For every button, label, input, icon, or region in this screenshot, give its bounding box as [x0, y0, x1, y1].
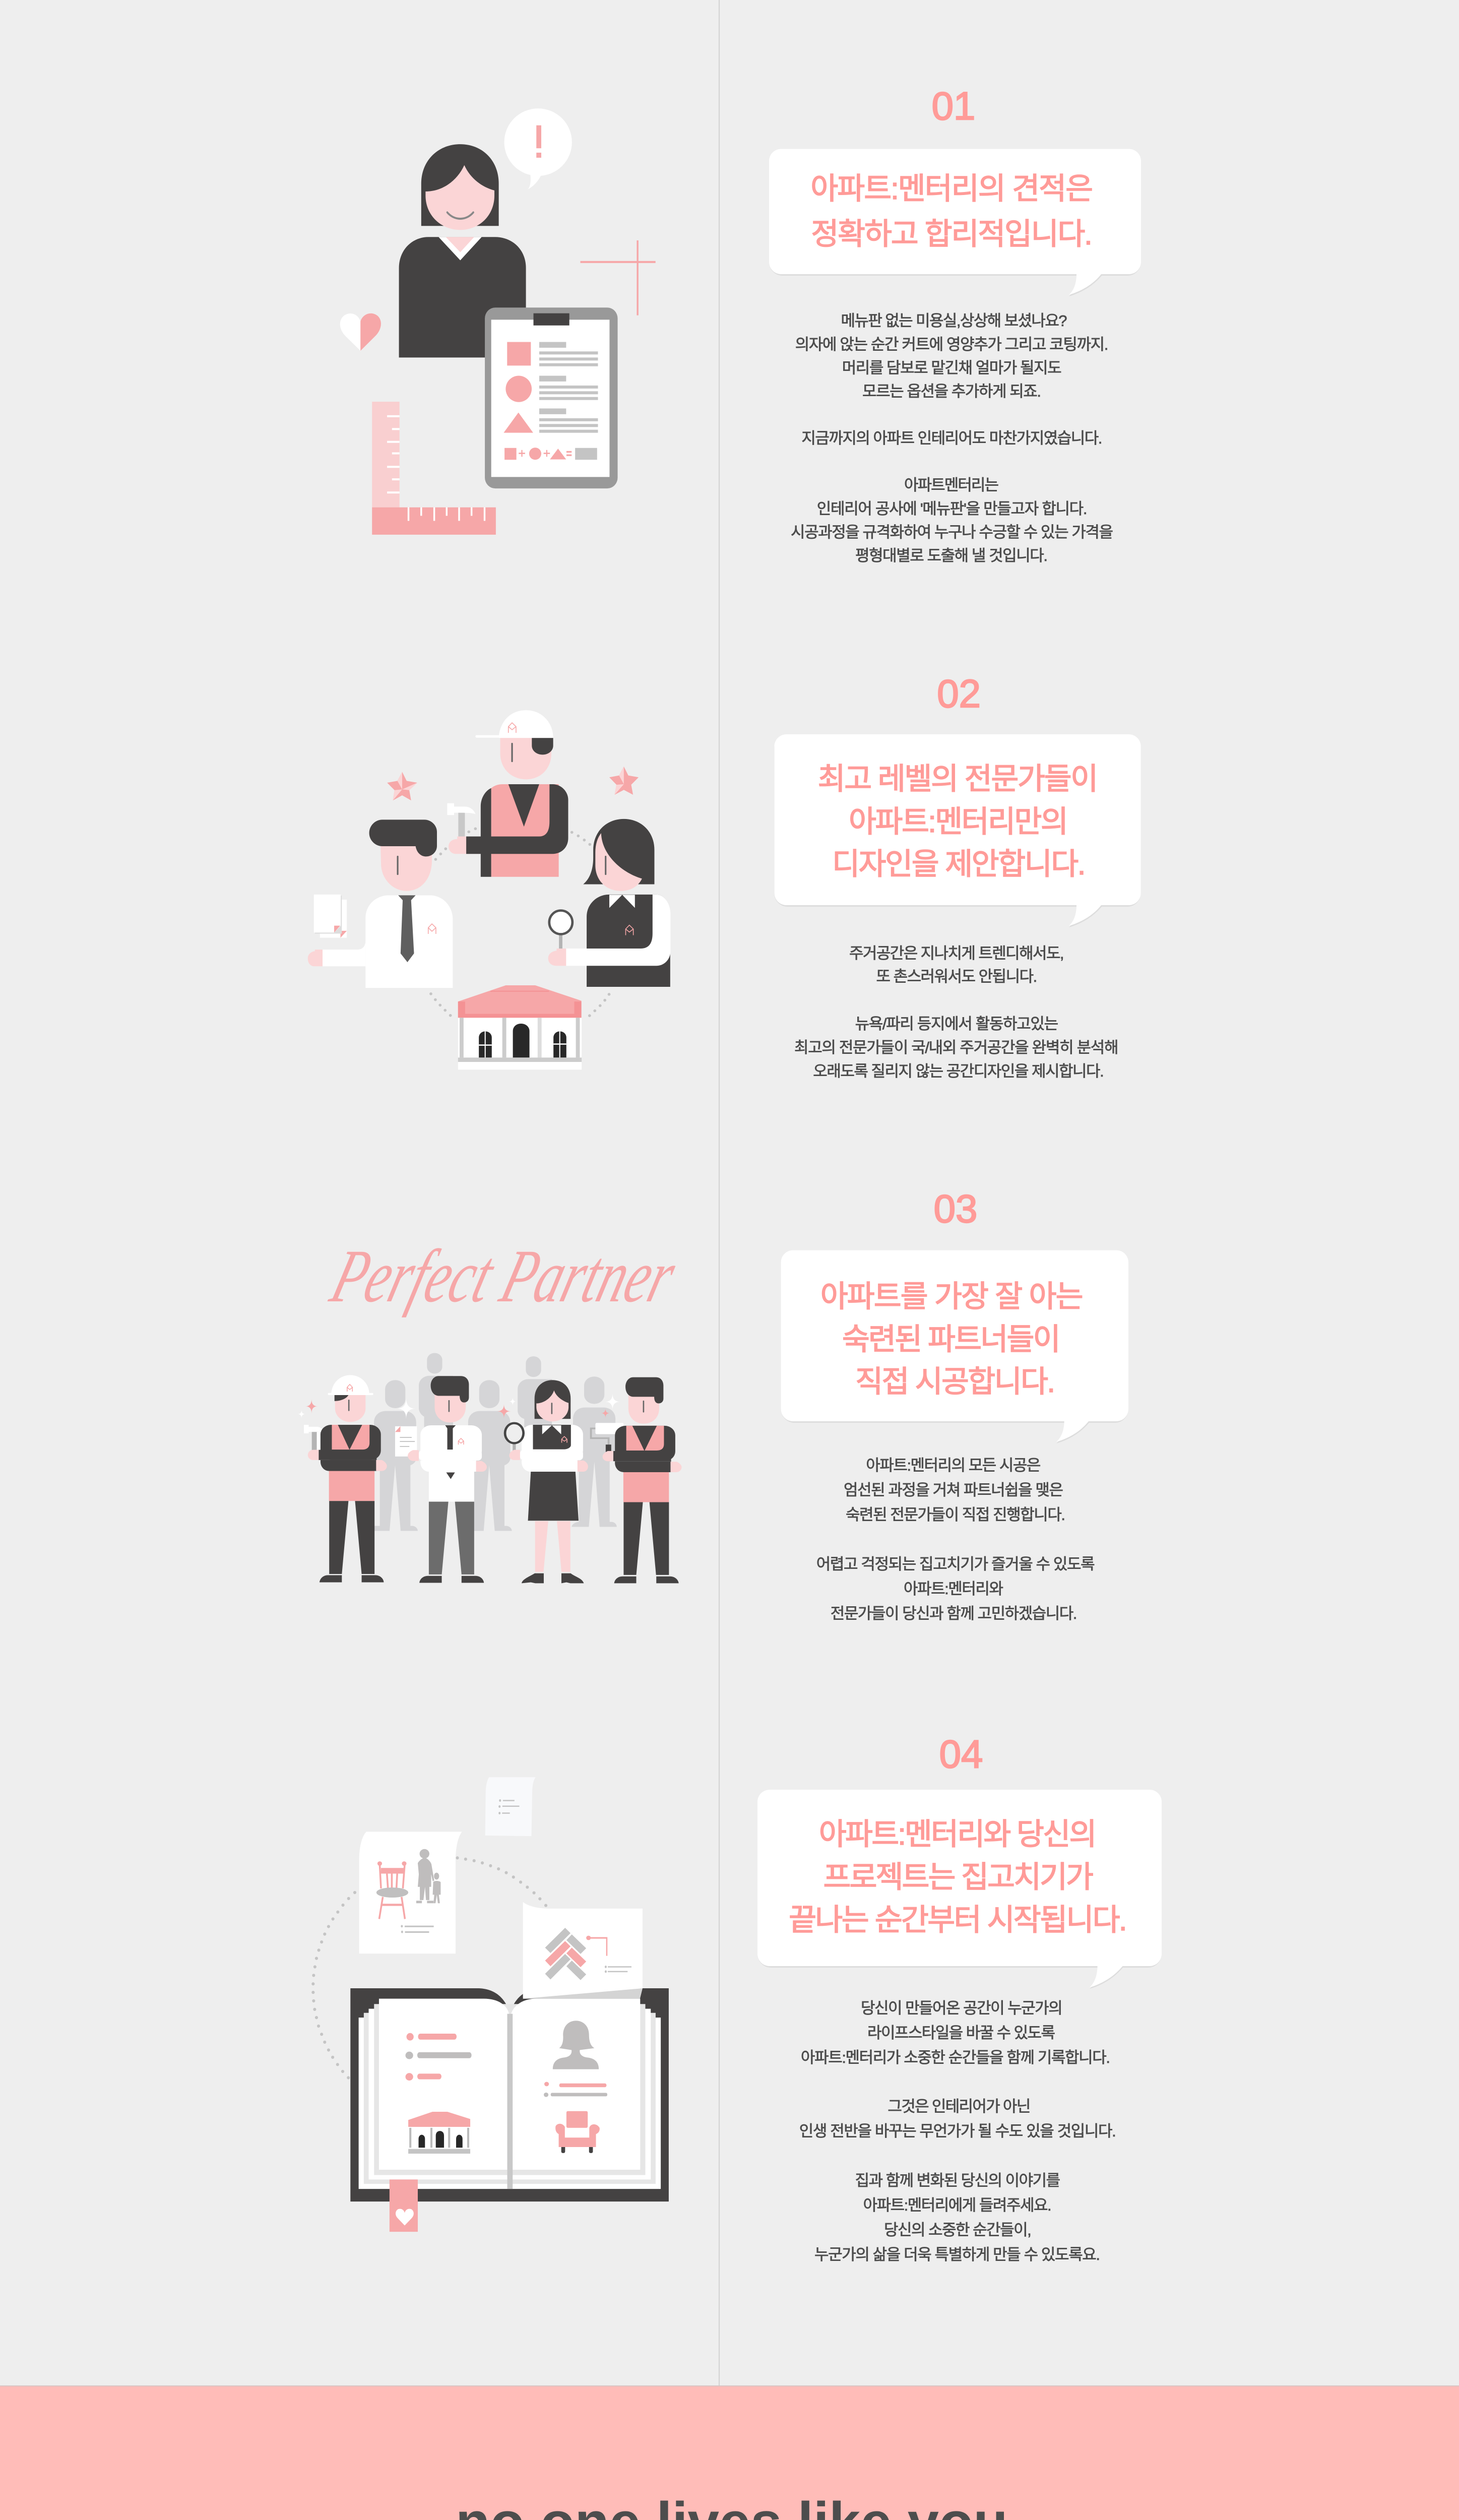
icon: speech bubble with exclamation — [504, 108, 572, 190]
body text 03: 어렵고 걱정되는 집고치기가 즐거울 수 있도록 — [816, 1555, 1095, 1573]
section 04 text — [757, 1732, 1162, 2263]
body text 04: 당신의 소중한 순간들이, — [884, 2221, 1032, 2239]
sparkles — [297, 1394, 620, 1419]
body text 01: 지금까지의 아파트 인테리어도 마찬가지였습니다. — [801, 429, 1102, 447]
body text 02: 최고의 전문가들이 국/내외 주거공간을 완벽히 분석해 — [794, 1039, 1119, 1056]
body text 04: 인생 전반을 바꾸는 무언가가 될 수도 있을 것입니다. — [799, 2122, 1116, 2140]
illustration: woman with estimate clipboard — [340, 108, 656, 535]
dotted connectors — [429, 827, 610, 1017]
right page list — [544, 2082, 607, 2097]
open book — [350, 1988, 669, 2232]
icon: ruler — [372, 402, 496, 535]
script title: Perfect Partner — [323, 1235, 685, 1318]
body text 01 — [791, 312, 1113, 564]
body text 04: 그것은 인테리어가 아닌 — [887, 2098, 1031, 2115]
figure: woman with magnifier — [505, 1380, 588, 1583]
speech bubble 03 — [781, 1250, 1128, 1443]
body text 04: 당신이 만들어온 공간이 누군가의 — [861, 1999, 1063, 2017]
speech bubble 04 — [757, 1790, 1162, 1989]
speech bubble 01 — [769, 149, 1141, 296]
body text 01: 모르는 옵션을 추가하게 되죠. — [862, 383, 1041, 400]
heading 01: 정확하고 합리적입니다. — [811, 217, 1093, 251]
section 03 text — [781, 1186, 1128, 1622]
speech bubble 02 — [774, 734, 1141, 927]
heading 01: 아파트:멘터리의 견적은 — [810, 172, 1093, 206]
figure: construction worker — [447, 710, 568, 877]
body text 03: 숙련된 전문가들이 직접 진행합니다. — [846, 1506, 1065, 1524]
body text 01: 평형대별로 도출해 낼 것입니다. — [855, 547, 1048, 564]
icon: clipboard — [485, 307, 618, 488]
heading 04 — [789, 1817, 1127, 1937]
dotted arc — [311, 1856, 547, 2080]
heading 02: 최고 레벨의 전문가들이 — [817, 762, 1098, 796]
floating paper: list — [485, 1777, 536, 1836]
body text 02: 주거공간은 지나치게 트렌디해서도, — [849, 944, 1064, 962]
icon: armchair — [555, 2111, 600, 2153]
body text 01: 메뉴판 없는 미용실,상상해 보셨나요? — [841, 312, 1067, 330]
heading 03: 직접 시공합니다. — [855, 1365, 1055, 1399]
figure: man in suit — [395, 1376, 487, 1583]
heading 04: 아파트:멘터리와 당신의 — [819, 1817, 1097, 1851]
body text 02: 오래도록 질리지 않는 공간디자인을 제시합니다. — [813, 1062, 1104, 1080]
body text 04 — [799, 1999, 1116, 2263]
section 01 text — [769, 84, 1141, 564]
floating paper: flooring sample — [523, 1902, 643, 1999]
icon: woman bust — [553, 2021, 599, 2069]
team figures — [297, 1353, 681, 1583]
floating paper: chair and family — [359, 1832, 462, 1954]
body text 02: 또 촌스러워서도 안됩니다. — [876, 968, 1037, 985]
body text 04: 누군가의 삶을 더욱 특별하게 만들 수 있도록요. — [814, 2246, 1100, 2263]
icon: bookmark with heart — [390, 2179, 418, 2232]
panel: closing pink section — [0, 2385, 1459, 2520]
figure: woman with magnifier — [548, 819, 670, 987]
body text 04: 아파트:멘터리가 소중한 순간들을 함께 기록합니다. — [801, 2049, 1110, 2066]
body text 01: 아파트멘터리는 — [904, 476, 999, 494]
figure: worker with hammer — [304, 1375, 387, 1583]
number 02: 02 — [937, 671, 981, 716]
section 02 text — [774, 671, 1141, 1080]
number 01: 01 — [932, 84, 975, 128]
illustration: three experts and house — [308, 710, 670, 1069]
icon: star left — [387, 772, 417, 800]
icon: heart — [340, 313, 381, 351]
body text 04: 집과 함께 변화된 당신의 이야기를 — [855, 2172, 1060, 2189]
icon: house — [458, 985, 582, 1069]
illustration: Perfect Partner team — [297, 1235, 685, 1583]
left page list — [405, 2033, 472, 2081]
heading 02: 아파트:멘터리만의 — [849, 805, 1068, 839]
body text 04: 아파트:멘터리에게 들려주세요. — [863, 2196, 1052, 2214]
body text 02 — [794, 944, 1119, 1080]
icon: crosshair lines — [580, 240, 656, 316]
heading 03 — [820, 1280, 1084, 1399]
body text 01: 시공과정을 규격화하여 누구나 수긍할 수 있는 가격을 — [791, 524, 1113, 541]
icon: woman — [399, 144, 526, 357]
icon: small house — [408, 2112, 470, 2154]
number 03: 03 — [934, 1186, 977, 1231]
body text 03: 아파트:멘터리와 — [904, 1580, 1003, 1598]
heading 02: 디자인을 제안합니다. — [832, 847, 1086, 881]
illustration: open book with floating papers — [311, 1777, 669, 2232]
figure: worker with paint roller — [591, 1377, 681, 1583]
icon: star right — [609, 767, 639, 795]
background silhouettes — [374, 1353, 617, 1531]
body text 03: 엄선된 과정을 거쳐 파트너쉽을 맺은 — [844, 1481, 1063, 1499]
body text 03: 전문가들이 당신과 함께 고민하겠습니다. — [831, 1605, 1077, 1622]
body text 03 — [816, 1457, 1095, 1622]
heading 01 — [810, 172, 1093, 251]
heading 02 — [817, 762, 1098, 881]
heading 03: 숙련된 파트너들이 — [842, 1322, 1061, 1356]
body text 04: 라이프스타일을 바꿀 수 있도록 — [867, 2024, 1055, 2042]
body text 03: 아파트:멘터리의 모든 시공은 — [866, 1457, 1041, 1474]
heading 04: 프로젝트는 집고치기가 — [823, 1860, 1094, 1894]
body text 01: 머리를 담보로 맡긴채 얼마가 될지도 — [842, 359, 1062, 377]
body text 02: 뉴욕/파리 등지에서 활동하고있는 — [855, 1015, 1058, 1033]
number 04: 04 — [939, 1732, 983, 1776]
figure: man in suit with documents — [308, 820, 453, 988]
heading 04: 끝나는 순간부터 시작됩니다. — [789, 1903, 1127, 1937]
body text 01: 인테리어 공사에 '메뉴판'을 만들고자 합니다. — [817, 500, 1088, 518]
body text 01: 의자에 앉는 순간 커트에 영양추가 그리고 코팅까지. — [795, 336, 1108, 353]
heading 03: 아파트를 가장 잘 아는 — [820, 1280, 1084, 1313]
